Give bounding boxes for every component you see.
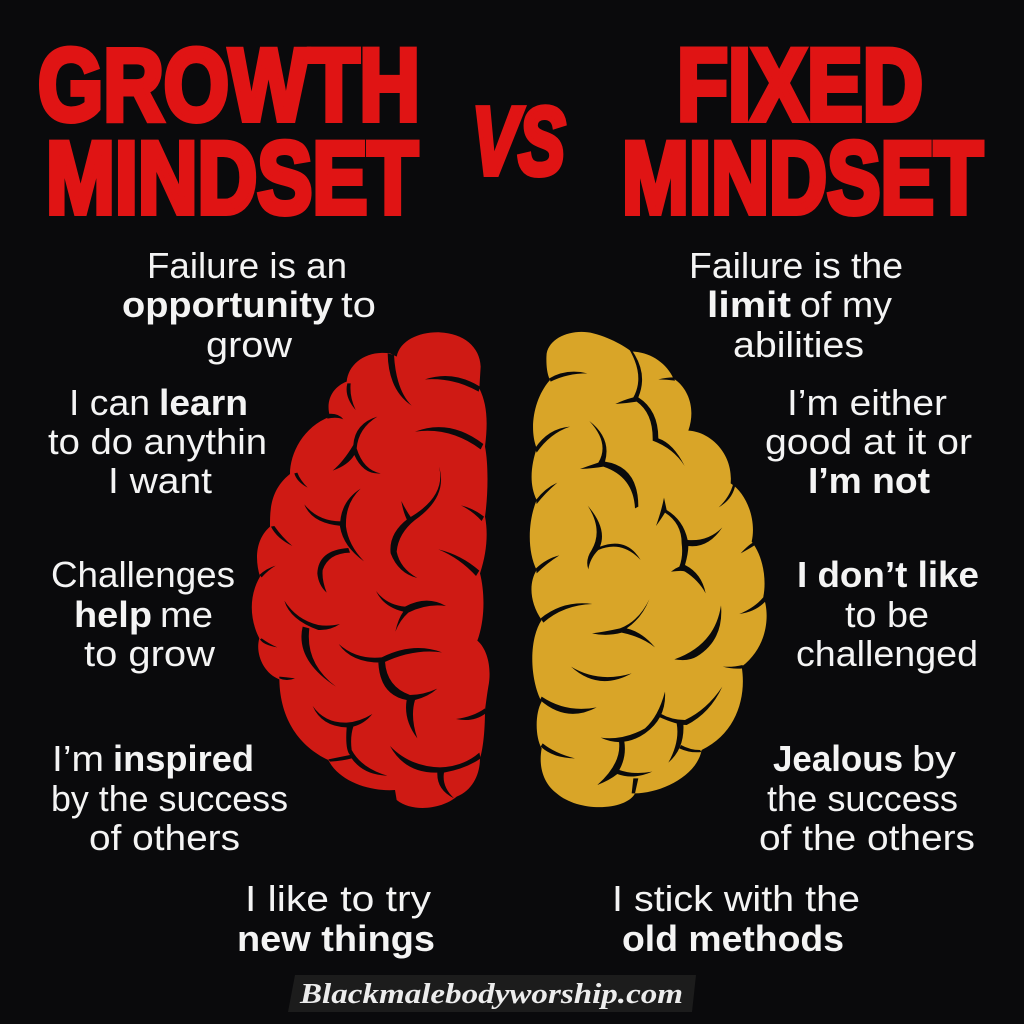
text: growth challenges: help xyxy=(74,594,152,635)
text: fixed challenged: I don’t like xyxy=(797,554,979,595)
text: fixed failure: abilities xyxy=(733,324,864,365)
text: growth inspired: of others xyxy=(89,817,240,858)
title: growth mindset: MINDSET xyxy=(46,121,418,235)
text: fixed either: I’m not xyxy=(808,460,930,501)
footer: website watermark: Blackmalebodyworship.com xyxy=(299,979,683,1010)
text: fixed jealous: the success xyxy=(767,778,958,819)
text: fixed old methods: old methods xyxy=(622,918,844,959)
text: growth failure: to xyxy=(341,284,376,325)
title: vs: VS xyxy=(472,88,565,195)
brain: yellow right hemisphere xyxy=(530,332,767,807)
brain: red left hemisphere xyxy=(252,332,490,808)
text: growth challenges: Challenges xyxy=(51,554,235,595)
text: growth inspired: by the success xyxy=(51,778,288,819)
text: growth new things: I like to try xyxy=(245,878,431,919)
text: fixed either: good at it or xyxy=(765,421,972,462)
text: fixed jealous: by xyxy=(912,738,956,779)
text: growth inspired: I’m xyxy=(52,738,104,779)
text: growth new things: new things xyxy=(237,918,435,959)
title: growth mindset: GROWTH xyxy=(38,28,420,142)
title: fixed mindset: FIXED xyxy=(677,28,923,142)
text: fixed jealous: of the others xyxy=(759,817,975,858)
text: fixed old methods: I stick with the xyxy=(612,878,860,919)
text: fixed failure: of my xyxy=(800,284,892,325)
text: fixed jealous: Jealous xyxy=(773,738,903,779)
text: growth challenges: to grow xyxy=(84,633,216,674)
title: growth mindset xyxy=(38,28,420,235)
text: growth learn: I can xyxy=(69,382,150,423)
text: growth failure: opportunity xyxy=(122,284,333,325)
text: growth failure: grow xyxy=(206,324,293,365)
title: fixed mindset xyxy=(622,28,983,235)
text: growth failure: Failure is an xyxy=(147,245,347,286)
text: fixed challenged: challenged xyxy=(796,633,978,674)
footer: website watermark xyxy=(288,975,696,1012)
text: fixed failure: Failure is the xyxy=(689,245,903,286)
text: growth learn: I want xyxy=(108,460,212,501)
text: fixed either: I’m either xyxy=(787,382,947,423)
text: fixed failure: limit xyxy=(707,284,791,325)
text: growth inspired: inspired xyxy=(113,738,254,779)
text: growth challenges: me xyxy=(160,594,213,635)
text: growth learn: to do anythin xyxy=(48,421,267,462)
text: fixed challenged: to be xyxy=(845,594,929,635)
text: growth learn: learn xyxy=(159,382,248,423)
